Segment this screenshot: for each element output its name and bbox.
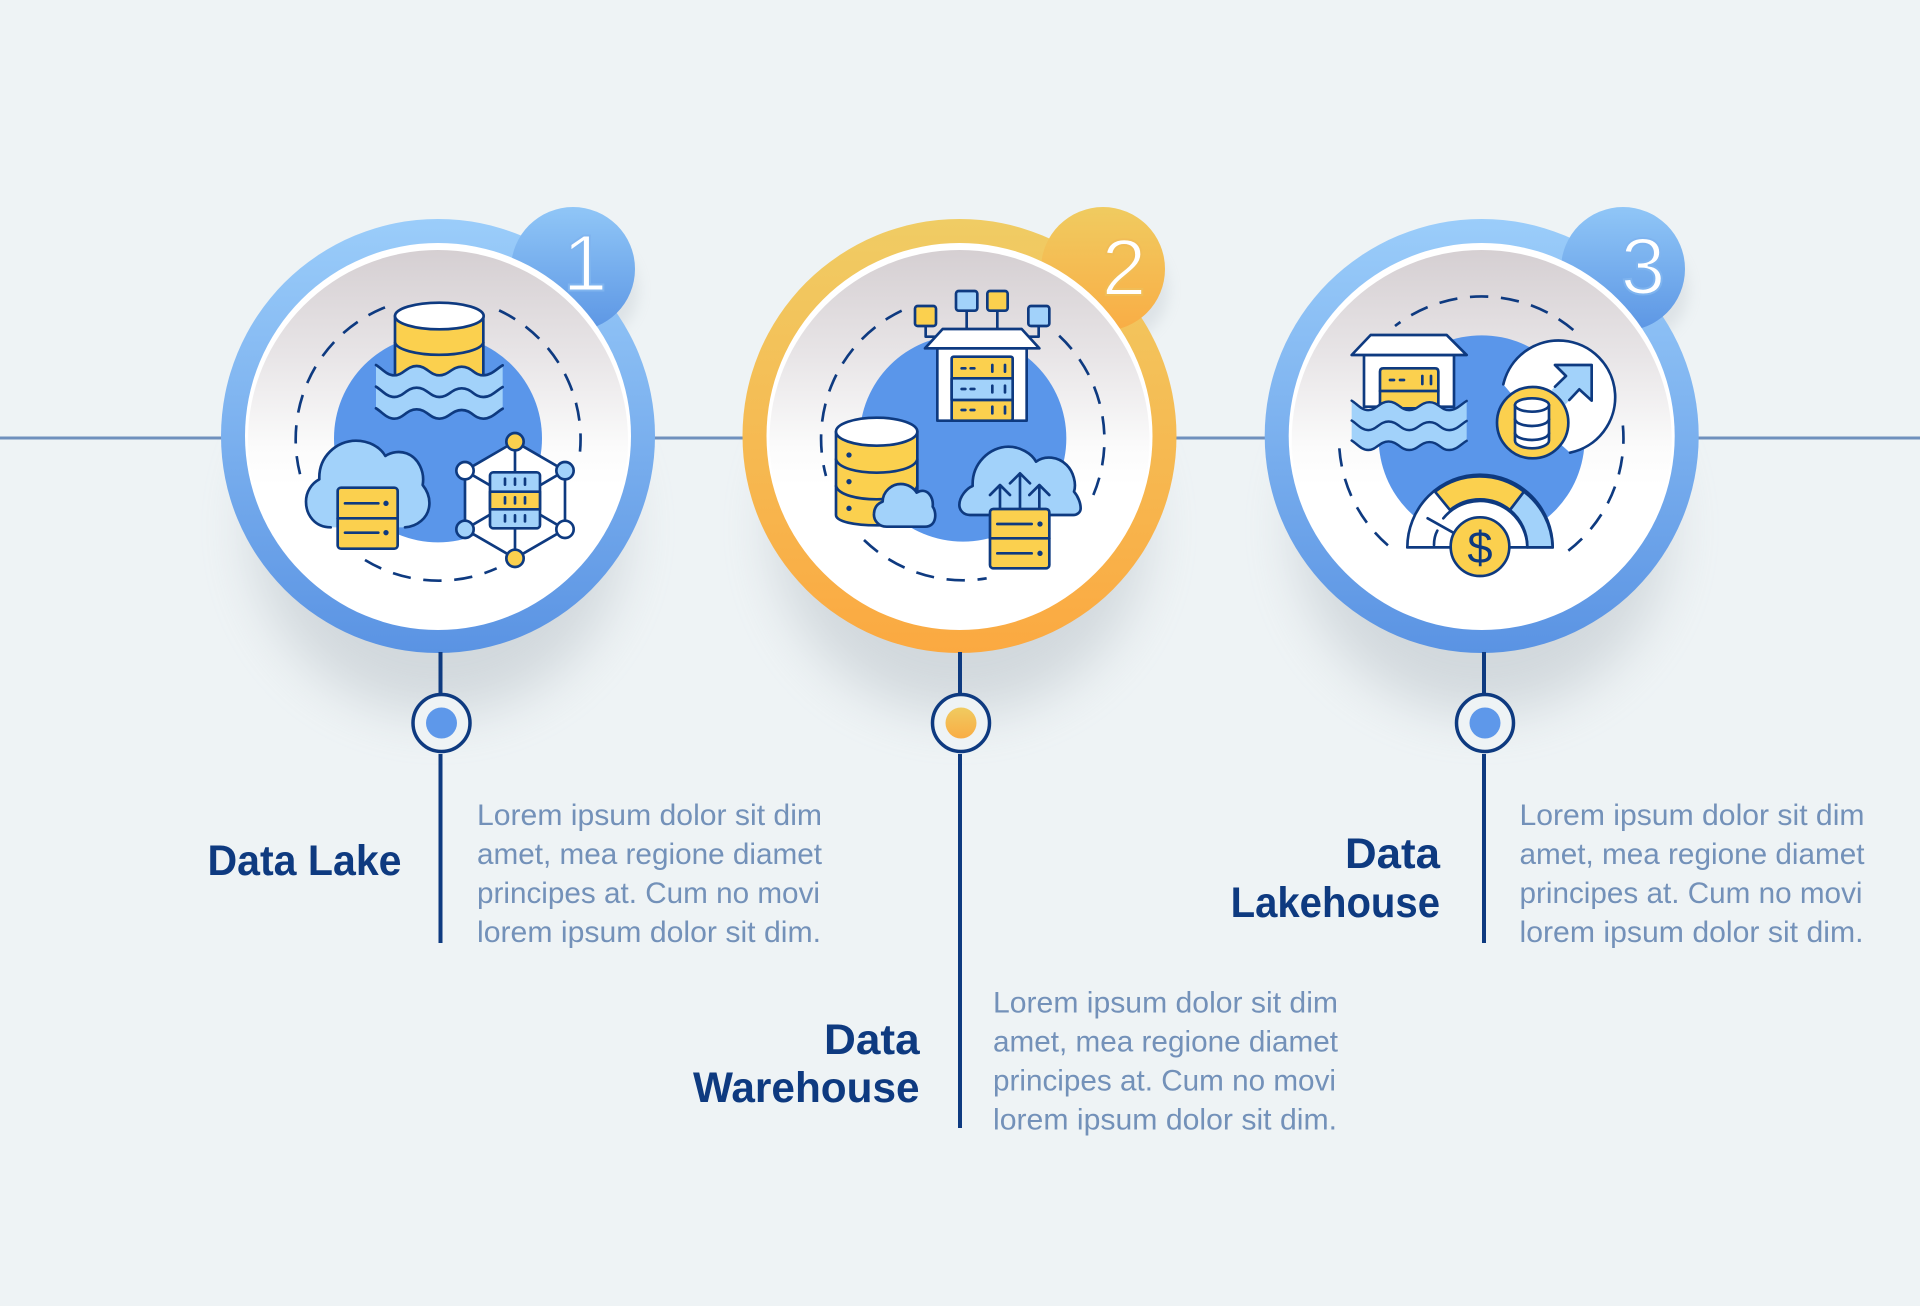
icon: dollar sign: $ — [1467, 522, 1493, 573]
drop shadow — [774, 238, 1168, 714]
text block: data lakehouse description: Lorem ipsum dolor sit dim — [1520, 799, 1864, 832]
text block: data lakehouse description: amet, mea regione diamet — [1520, 838, 1865, 871]
heading: Data Warehouse: Data — [824, 1016, 921, 1064]
icon group: data warehouse — [821, 291, 1104, 580]
text block: data warehouse description: principes at. Cum no movi — [993, 1064, 1336, 1098]
heading: Data Lakehouse — [1231, 830, 1441, 927]
icon: warehouse in water — [1352, 335, 1467, 450]
heading: Data Warehouse — [693, 1016, 921, 1112]
outer ring — [221, 219, 655, 653]
heading: Data Lakehouse: Data — [1345, 830, 1441, 878]
connector with dot 3 — [1456, 652, 1514, 943]
dashed orbit — [821, 311, 1104, 580]
dashed orbit — [296, 307, 581, 581]
icon: data growth — [1497, 341, 1615, 458]
number 1: 1 — [563, 218, 607, 308]
inner disc — [1289, 243, 1675, 630]
panel: data warehouse — [693, 207, 1339, 1136]
inner disc — [766, 243, 1152, 630]
text block: data lake description: lorem ipsum dolor sit dim. — [477, 916, 821, 949]
panel: data lakehouse — [1231, 207, 1865, 949]
drop shadow — [1296, 238, 1688, 714]
icon: database with small cloud — [836, 418, 935, 527]
text block: data lake description: amet, mea regione diamet — [477, 838, 823, 871]
number 2: 2 — [1102, 223, 1146, 312]
text block: data lake description: principes at. Cum no movi — [477, 877, 820, 910]
number badge 3 — [1561, 207, 1685, 331]
outer ring — [742, 219, 1176, 653]
number badge 1 — [511, 207, 635, 331]
drop shadow — [252, 238, 638, 714]
outer ring — [1265, 219, 1699, 653]
icon: cost gauge — [1407, 475, 1553, 576]
text block: data lakehouse description — [1520, 799, 1865, 949]
dashed orbit — [1339, 296, 1623, 551]
heading: Data Lakehouse: Lakehouse — [1231, 879, 1440, 927]
heading: Data Lake: Data Lake — [208, 837, 402, 885]
inner disc — [245, 243, 631, 630]
icon: network server — [456, 433, 574, 567]
connector with dot 2 — [932, 652, 990, 1128]
text block: data lake description: Lorem ipsum dolor sit dim — [477, 799, 822, 832]
text block: data warehouse description: lorem ipsum dolor sit dim. — [993, 1104, 1337, 1136]
text block: data lakehouse description: lorem ipsum dolor sit dim. — [1520, 916, 1864, 949]
icon group: data lakehouse — [1339, 296, 1623, 576]
icon: cloud server — [306, 441, 429, 549]
text block: data warehouse description: Lorem ipsum dolor sit dim — [993, 986, 1338, 1020]
blue backdrop circle — [334, 334, 542, 542]
icon: warehouse with connected nodes — [915, 291, 1049, 421]
number badge 2 — [1041, 207, 1165, 331]
text block: data warehouse description: amet, mea regione diamet — [993, 1026, 1339, 1058]
blue backdrop circle — [1379, 335, 1585, 541]
text block: data lake description — [477, 799, 823, 949]
text block: data lakehouse description: principes at. Cum no movi — [1520, 877, 1862, 910]
connector with dot 1 — [413, 652, 470, 943]
horizontal connector line — [0, 436, 1920, 440]
number 3: 3 — [1621, 222, 1665, 310]
panel: data lake — [208, 207, 823, 949]
icon: cloud upload server — [959, 447, 1081, 568]
icon: database in water — [376, 303, 503, 419]
heading: Data Warehouse: Warehouse — [693, 1064, 920, 1112]
blue backdrop circle — [860, 335, 1066, 542]
text block: data warehouse description — [993, 986, 1339, 1136]
icon group: data lake — [296, 303, 581, 581]
